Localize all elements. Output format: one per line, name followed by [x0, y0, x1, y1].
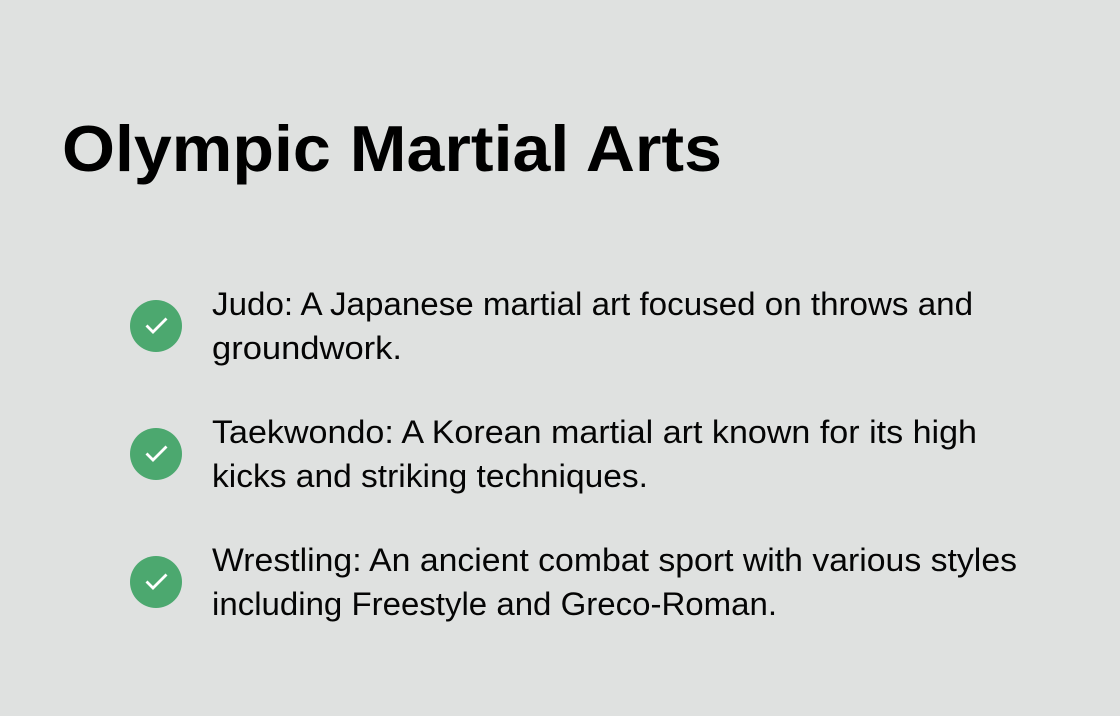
text: judo description: groundwork.	[212, 330, 402, 366]
list item: wrestling	[130, 542, 1017, 622]
text: taekwondo description: Taekwondo: A Korean martial art known for its high	[212, 414, 977, 450]
text: wrestling description: including Freestyle and Greco-Roman.	[212, 586, 777, 622]
icon: judo check badge	[130, 300, 182, 352]
text: judo description	[212, 286, 973, 366]
title: Olympic Martial Arts	[62, 112, 722, 185]
list item: judo	[130, 286, 973, 366]
text: wrestling description: Wrestling: An ancient combat sport with various styles	[212, 542, 1017, 578]
icon: wrestling check badge	[130, 556, 182, 608]
list item: taekwondo	[130, 414, 977, 494]
text: wrestling description	[212, 542, 1017, 622]
text: taekwondo description: kicks and striking techniques.	[212, 458, 648, 494]
text: taekwondo description	[212, 414, 977, 494]
text: judo description: Judo: A Japanese martial art focused on throws and	[212, 286, 973, 322]
icon: taekwondo check badge	[130, 428, 182, 480]
